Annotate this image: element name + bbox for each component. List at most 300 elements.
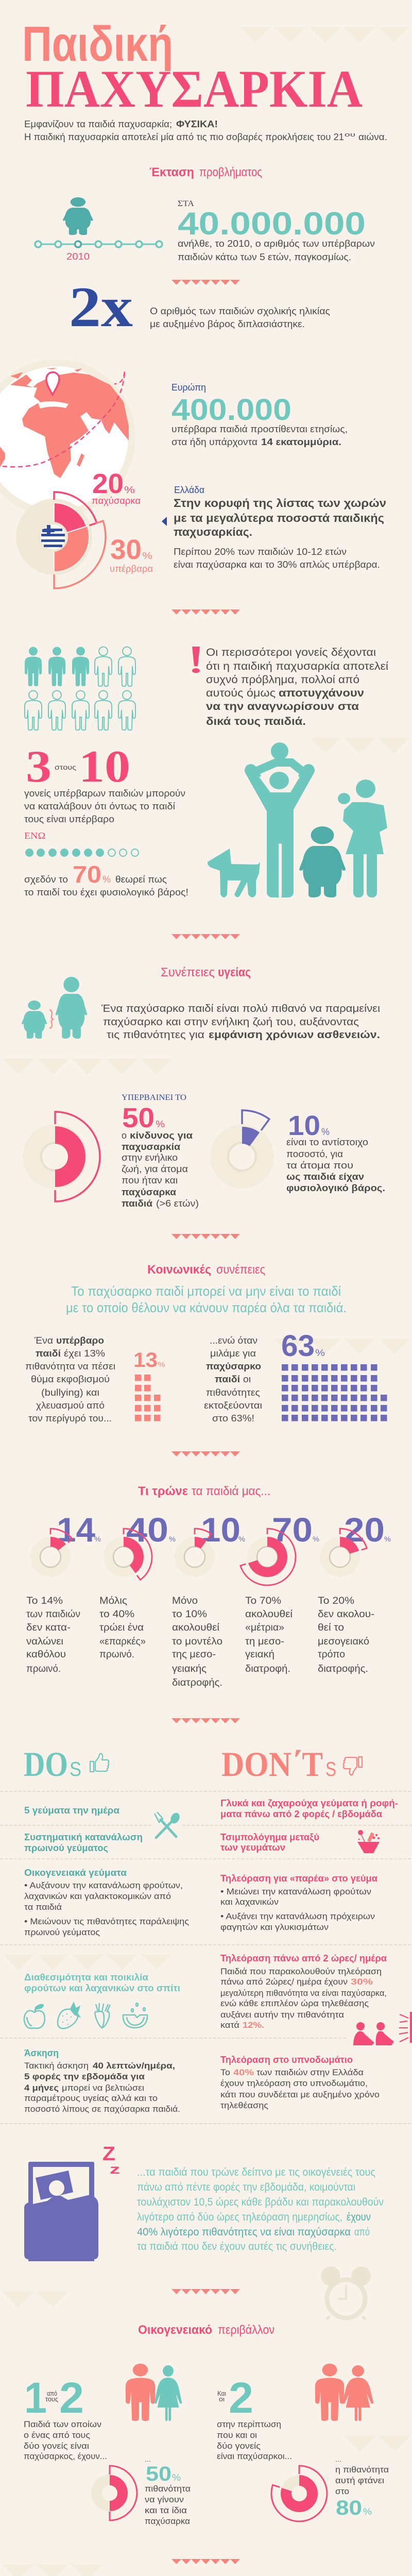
text: 50% chance [145, 2456, 191, 2526]
numbers: diet percentages: % [169, 1535, 176, 1543]
chart: Greece donut [16, 468, 153, 588]
stat: both parents: στην περίπτωση [217, 2419, 281, 2429]
subheading: με το οποίο θέλουν να κάνουν παρέα όλα τα παιδιά. [66, 1300, 347, 1315]
text: family dinner and sleep: τουλάχιστον 10,5 ώρες κάθε βράδυ και παρακολουθούν [137, 2196, 384, 2208]
decorative pennants [309, 738, 410, 754]
text: overweight bullying: (bullying) και [41, 1387, 99, 1398]
text: 50% chance: παχύσαρκα [145, 2516, 190, 2526]
stat: Europe 400.000: υπέρβαρα παιδιά προστίθενται ετησίως, [171, 424, 348, 434]
icon: exclamation mark [192, 647, 200, 673]
icon: thumb up [90, 1754, 109, 1772]
stat: Europe 400.000: στα ήδη υπάρχοντα [171, 437, 258, 447]
text: overweight bullying: Ένα [34, 1335, 53, 1346]
text: 50%: κίνδυνος για [130, 1130, 193, 1141]
text: obese bullying: μιλάμε για [210, 1348, 256, 1359]
text: 80% chance: αυτή φτάνει [335, 2476, 384, 2485]
text: family dinner and sleep: ...τα παιδιά που τρώνε δείπνο με τις οικογένειές τους [137, 2166, 375, 2178]
icon: sleeping child: Z [102, 2143, 115, 2165]
do: breakfast [24, 1832, 143, 1853]
text: column 14%: δεν κατα- [26, 1622, 71, 1633]
pennant row [171, 1451, 240, 1456]
arrow: pointer to Greece [162, 517, 167, 526]
stat: Europe 400.000: 400.000 [171, 393, 291, 427]
heading: extent of the problem [149, 165, 262, 179]
pennant row [171, 1234, 240, 1239]
do: family meals: πρωινού γεύματος [24, 1927, 100, 1937]
stat: 70%: θεωρεί πως [115, 874, 167, 885]
don't: TV with meals: • Μειώνει την κατανάλωση φρούτων [220, 1887, 371, 1896]
text: column 10%: διατροφής. [172, 1677, 222, 1688]
text: column 40%: Μόλις [99, 1596, 127, 1606]
text: column 10%: της μεσο- [172, 1649, 216, 1660]
icon: strawberry [58, 2003, 79, 2028]
text: column 20%: Το 20% [318, 1596, 354, 1606]
icon: children watching TV [353, 2012, 412, 2045]
do: fruit and vegetables: φρούτων και λαχανικών στο σπίτι [24, 1983, 180, 1993]
title: Παιδική [22, 16, 173, 72]
text: column 10%: το μοντέλο [172, 1636, 222, 1647]
title: ΠΑΧΥΣΑΡΚΙΑ [26, 60, 363, 118]
text: health consequences: παχύσαρκο και στην ενήλικη ζωή του, αυξάνοντας [103, 1016, 359, 1028]
pennant row [171, 1718, 240, 1723]
text: 50% [122, 1093, 199, 1209]
stat: 40.000.000 [178, 199, 375, 262]
chart: 13% squares [133, 1349, 165, 1421]
text: Greece: Περίπου 20% των παιδιών 10-12 ετών [174, 547, 347, 557]
text: obese bullying: οι [243, 1374, 251, 1384]
text: parents accept: αποτυγχάνουν [279, 687, 364, 699]
icon: globe [0, 359, 135, 517]
text: family dinner and sleep: πάνω από πέντε φορές την εβδομάδα, κοιμούνται [137, 2181, 355, 2193]
text: column 70%: διατροφή. [245, 1664, 290, 1674]
text: overweight bullying: παιδί [36, 1348, 61, 1359]
text: column 70%: τη μεσο- [245, 1636, 284, 1647]
do: fruit and vegetables [24, 1972, 180, 1993]
text: health consequences: εμφάνιση χρόνιων ασθενειών. [209, 1029, 380, 1041]
text: obese bullying: εκτοξεύονται [204, 1400, 262, 1411]
text: family dinner and sleep: λιγότερο από δύο ώρες τηλεόραση ημερησίως, [137, 2211, 342, 2223]
intro text [24, 119, 387, 142]
don't: TV in bedroom: έχουν τηλεόραση στο υπνοδωμάτιο, [220, 2078, 368, 2088]
text: family dinner and sleep [137, 2166, 384, 2252]
text: column 20%: δεν ακολου- [318, 1609, 374, 1620]
text: 50% chance: και τα ίδια [145, 2505, 187, 2515]
text: Greece: με τα μεγαλύτερα ποσοστά παιδικής [174, 512, 384, 524]
don't: snacking: Τσιμπολόγημα μεταξύ [220, 1832, 319, 1843]
text: 80% chance: 80 [336, 2497, 362, 2519]
text: parents accept: ότι η παιδική παχυσαρκία αποτελεί [206, 660, 388, 672]
heading: extent of the problem: Έκταση [149, 165, 194, 179]
do: exercise: Τακτική άσκηση [24, 2061, 89, 2071]
text: column 40% [99, 1596, 146, 1660]
text: 50% chance: να γίνουν [145, 2495, 184, 2504]
heading: family environment: Οικογενειακό [138, 2323, 212, 2337]
text: column 14% [26, 1596, 80, 1674]
text: 10%: φυσιολογικό βάρος. [286, 1183, 385, 1193]
text: column 14%: των παιδιών [26, 1609, 80, 1620]
do: breakfast: πρωινού γεύματος [24, 1843, 108, 1853]
text: 50%: παχυσαρκία [122, 1142, 180, 1152]
stat: 40.000.000: παιδιών κάτω των 5 ετών, παγκοσμίως. [178, 252, 351, 262]
text: obese bullying: πιθανότητες [206, 1387, 260, 1398]
stat: 40.000.000: ανήλθε, το 2010, ο αριθμός των υπέρβαρων [178, 239, 375, 249]
don't: sweets [220, 1798, 398, 1819]
text: column 10%: το 10% [172, 1609, 207, 1620]
stat: 2x [69, 276, 330, 339]
chart: 63% squares: 63 [281, 1329, 315, 1363]
don't: sweets: Γλυκά και ζαχαρούχα γεύματα ή ροφή- [220, 1798, 398, 1809]
icon: overweight child [63, 197, 93, 235]
text: column 40%: πρωινό. [99, 1649, 134, 1660]
stat: 40.000.000: 40.000.000 [178, 206, 366, 242]
text: 10%: ποσοστό, για [286, 1149, 343, 1159]
don't: TV in bedroom: Το [220, 2067, 230, 2077]
text: 50%: % [156, 1119, 165, 1129]
text: Greece: είναι παχύσαρκα και το 30% απλώς υπέρβαρα. [174, 560, 380, 570]
decorative pennants [2, 2564, 103, 2576]
subheading [66, 1283, 347, 1315]
heading: what children eat [138, 1484, 270, 1498]
icon: sleeping child: z [110, 2161, 120, 2177]
text: 50%: ο [122, 1130, 127, 1141]
icon: child to adult [22, 977, 87, 1039]
heading: health consequences: υγείας [218, 965, 251, 979]
numbers: diet percentages: % [384, 1535, 391, 1543]
stat: both parents: Και [217, 2389, 226, 2397]
dog [208, 849, 260, 897]
text: obese bullying: παχύσαρκο [206, 1361, 261, 1371]
stat: 3 of 10: τους είναι υπέρβαρο [24, 814, 114, 824]
heading: social consequences [147, 1263, 265, 1277]
icon: thumb down [344, 1757, 362, 1775]
text: family dinner and sleep: έχουν [347, 2211, 371, 2223]
stat: 1 of 2 [24, 2374, 107, 2461]
numbers: diet percentages [57, 1511, 391, 1549]
heading: DOs [24, 1744, 109, 1784]
don't: snacking [220, 1832, 319, 1853]
stat: both parents: οι [219, 2395, 225, 2403]
stat: 3 of 10: 3 [26, 742, 52, 792]
dots: 70% [25, 849, 139, 857]
do: family meals: • Αυξάνουν την κατανάλωση φρούτων, [24, 1880, 183, 1890]
text: column 20%: θεί το [318, 1622, 344, 1633]
text: column 20%: μεσογειακό [318, 1636, 369, 1647]
numbers: diet percentages: 20 [344, 1511, 385, 1549]
text: 50%: που ήταν και [122, 1175, 178, 1185]
stat: 70%: το παιδί του έχει φυσιολογικό βάρος! [24, 887, 188, 897]
stat: 70%: % [102, 874, 111, 885]
chart: Greece donut: % [142, 551, 152, 561]
do: exercise: 5 φορές την εβδομάδα για [24, 2072, 145, 2081]
do: exercise: Άσκηση [24, 2048, 59, 2058]
text: parents accept: αυτούς όμως [206, 687, 276, 699]
numbers: diet percentages: 70 [272, 1511, 313, 1549]
icon: apple [24, 2005, 45, 2028]
intro text: αιώνα. [358, 132, 387, 142]
text: column 70% [245, 1596, 293, 1674]
chart: 20% donut [320, 1529, 367, 1577]
stat: both parents [217, 2374, 292, 2461]
don't: TV with meals: • Αυξάνει την κατανάλωση πρόχειρων [220, 1911, 375, 1921]
decorative pennants top [239, 27, 410, 43]
pennant row [171, 934, 240, 939]
text: overweight bullying: πιθανότητα να πέσει [25, 1361, 115, 1371]
do: fruit and vegetables: Διαθεσιμότητα και ποικιλία [24, 1972, 148, 1982]
icon: couple, both obese [315, 2364, 373, 2421]
do: exercise: παραμέτρους υγείας αλλά και το [24, 2093, 158, 2103]
text: overweight bullying: θύμα εκφοβισμού [31, 1374, 110, 1384]
intro text: Η παιδική παχυσαρκία αποτελεί μία από τις πιο σοβαρές προκλήσεις του 21 [24, 132, 344, 142]
stat: 70%: 70 [73, 861, 101, 888]
text: 10%: τα άτομα που [286, 1160, 353, 1171]
father with child [251, 742, 308, 898]
text: column 14%: πρωινό. [26, 1664, 61, 1674]
text: column 40%: «επαρκές» [99, 1636, 146, 1647]
don't: snacking: των γευμάτων [220, 1842, 285, 1853]
chart: Greece donut: 30 [110, 534, 142, 565]
stat: 1 of 2: 1 [24, 2374, 47, 2422]
stat: 1 of 2: τους [45, 2395, 58, 2403]
don't: TV over 2 hours: μεγαλύτερη πιθανότητα να είναι παχύσαρκα, [220, 1988, 387, 1998]
stat: 1 of 2: δύο γονείς είναι [24, 2441, 89, 2451]
chart: Greece donut: % [124, 485, 135, 495]
numbers: diet percentages: % [238, 1535, 245, 1543]
overweight child [299, 826, 346, 897]
text: 50%: (>6 ετών) [156, 1198, 199, 1209]
icon: snack bowl [357, 1830, 380, 1853]
do: exercise: 4 μήνες [24, 2083, 59, 2093]
numbers: diet percentages: 10 [201, 1511, 241, 1549]
do: exercise: ποσοστό λίπους σε παχύσαρκα παιδιά. [24, 2104, 180, 2114]
dashed route [3, 371, 125, 467]
text: 50%: ζωή, για άτομα [122, 1164, 188, 1174]
text: 10%: ως παιδιά είχαν [286, 1172, 364, 1182]
chart: 70% donut [241, 1529, 296, 1585]
text: 10%: 10 [288, 1110, 320, 1141]
text: obese bullying [204, 1335, 262, 1423]
don't: TV in bedroom [220, 2055, 380, 2110]
text: column 70%: γειακή [245, 1649, 274, 1660]
numbers: diet percentages: % [94, 1535, 101, 1543]
icon: family [208, 742, 387, 898]
text: column 70%: Το 70% [245, 1596, 281, 1606]
do: exercise: μπορεί να βελτιώσει [62, 2083, 144, 2093]
heading: social consequences: συνέπειες [216, 1263, 265, 1277]
don't: TV with meals: Τηλεόραση για «παρέα» στο γεύμα [220, 1873, 377, 1884]
intro text: ΦΥΣΙΚΑ! [176, 119, 218, 129]
don't: TV in bedroom: Τηλεόραση στο υπνοδωμάτιο [220, 2055, 353, 2065]
text: Greece [174, 485, 386, 570]
mother with baby [338, 779, 387, 897]
chart: 40% donut [104, 1529, 152, 1580]
don't: TV over 2 hours: αυξάνει αυτήν την πιθανότητα [220, 2010, 344, 2020]
text: 50%: παχύσαρκα [122, 1187, 176, 1197]
text: overweight bullying [25, 1335, 115, 1423]
heading: DOs: DO [24, 1744, 68, 1784]
text: 50% chance: % [172, 2472, 181, 2483]
text: column 40%: το 40% [99, 1609, 134, 1620]
heading: extent of the problem: προβλήματος [199, 165, 262, 179]
text: 80% chance: ... [335, 2456, 341, 2463]
chart: 50% family donut [91, 2466, 137, 2520]
text: overweight bullying: έχει 13% [64, 1348, 105, 1359]
do: breakfast: Συστηματική κατανάλωση [24, 1832, 143, 1842]
chart: 63% squares [281, 1329, 387, 1421]
do: family meals [24, 1868, 189, 1937]
chart: 10% donut [210, 1110, 274, 1189]
do: family meals: λαχανικών και γαλακτοκομικών από [24, 1891, 171, 1901]
text: family dinner and sleep: τα παιδιά που δεν έχουν αυτές τις συνήθειες. [137, 2241, 337, 2252]
don't: TV in bedroom: 40% [233, 2067, 254, 2077]
chart: Greece donut: υπέρβαρα [110, 564, 153, 574]
icon: sleeping child [24, 2143, 120, 2261]
do: exercise [24, 2048, 180, 2114]
heading: family environment: περιβάλλον [218, 2323, 274, 2337]
chart: 10% donut [175, 1529, 215, 1577]
do: exercise: 40 λεπτών/ημέρα, [93, 2061, 175, 2071]
stat: 2x: με αυξημένο βάρος διπλασιάστηκε. [150, 319, 305, 329]
stat: 1 of 2: 2 [59, 2374, 84, 2422]
text: 80% chance: η πιθανότητα [335, 2465, 389, 2475]
icon: couple, one obese [126, 2364, 182, 2421]
heading: health consequences: Συνέπειες [161, 965, 215, 979]
chart: Greece donut: παχύσαρκα [92, 496, 141, 506]
heading: DON'Ts: S [325, 1758, 336, 1781]
chart: 13% squares: % [158, 1360, 165, 1368]
heading: what children eat: Τι τρώνε [138, 1484, 188, 1498]
icon: Greek flag [41, 524, 65, 549]
text: column 14%: ναλώνει [26, 1636, 63, 1647]
chart: 63% squares: % [315, 1348, 325, 1358]
do: family meals: Οικογενειακά γεύματα [24, 1868, 127, 1878]
text: column 10%: ακολουθεί [172, 1622, 220, 1633]
text: obese bullying: στο 63%! [212, 1413, 254, 1423]
numbers: diet percentages: 14 [57, 1511, 95, 1549]
text: 10%: είναι το αντίστοιχο [286, 1137, 368, 1147]
intro text: ου [345, 132, 355, 138]
chart: Greece donut: 20 [92, 468, 124, 499]
stat: 3 of 10: ΕΝΩ [24, 831, 45, 841]
icon grid: parents [25, 647, 135, 730]
text: column 10%: Μόνο [172, 1596, 198, 1606]
heading: social consequences: Κοινωνικές [147, 1263, 211, 1277]
icons: fruit and vegetables [24, 2003, 147, 2028]
text: 80% chance: στο [335, 2486, 349, 2496]
stat: 1 of 2: ο ένας από τους [24, 2430, 90, 2440]
stat: 70%: σχεδόν το [24, 874, 68, 885]
pennant row [171, 2289, 240, 2294]
timeline 2010 [35, 241, 162, 262]
map pin [46, 372, 59, 395]
stat: Europe 400.000: Ευρώπη [171, 382, 206, 393]
intro text: Εμφανίζουν τα παιδιά παχυσαρκία; [24, 119, 172, 129]
chart: 13% squares: 13 [133, 1349, 158, 1371]
text: 50%: στην ενήλικο [122, 1153, 178, 1163]
text: column 10%: γειακής [172, 1664, 207, 1674]
decorative pennants [2, 2292, 68, 2308]
text: parents accept: να την αναγνωρίσουν στα [206, 701, 359, 713]
stat: both parents: 2 [229, 2374, 253, 2422]
stat: 2x: Ο αριθμός των παιδιών σχολικής ηλικίας [150, 306, 330, 316]
chart: 14% donut [30, 1529, 72, 1577]
pennant row [171, 2559, 240, 2564]
text: overweight bullying: υπέρβαρο [56, 1335, 104, 1346]
don't: TV with meals [220, 1873, 377, 1932]
do: family meals: • Μειώνουν τις πιθανότητες παράλειψης [24, 1917, 189, 1926]
stat: both parents: που και οι [217, 2430, 257, 2440]
decorative pennants [3, 1059, 173, 1075]
heading: health consequences [161, 965, 251, 979]
don't: TV over 2 hours: Παιδιά που παρακολουθούν τηλεόραση [220, 1967, 382, 1976]
heading: DOs: S [70, 1758, 81, 1781]
text: 10%: % [321, 1127, 330, 1137]
text: column 20%: τρόπο [318, 1649, 345, 1660]
text: family dinner and sleep: 40% λιγότερο πιθανότητες να είναι παχύσαρκα [137, 2226, 351, 2238]
don't: TV in bedroom: των παιδιών στην Ελλάδα [256, 2067, 364, 2077]
stat: 3 of 10: 10 [79, 742, 130, 792]
text: 50%: ΥΠΕΡΒΑΙΝΕΙ ΤΟ [122, 1093, 186, 1102]
text: 50% chance: ... [145, 2456, 151, 2463]
text: obese bullying: παιδί [215, 1374, 240, 1384]
text: column 14%: καθόλου [26, 1649, 66, 1660]
chart: 80% family donut [271, 2466, 327, 2521]
stat: 1 of 2: από [47, 2389, 57, 2397]
stat: Europe 400.000 [171, 382, 348, 447]
don't: TV in bedroom: τηλεθέασης [220, 2100, 268, 2110]
text: 50% chance: 50 [146, 2463, 171, 2485]
text: 50% chance: πιθανότητα [145, 2484, 191, 2494]
numbers: diet percentages: % [313, 1535, 319, 1543]
text: column 70%: ακολουθεί [245, 1609, 293, 1620]
text: parents accept: δικά τους παιδιά. [206, 716, 306, 727]
text: health consequences: τις πιθανότητες για [107, 1029, 204, 1041]
text: column 20%: διατροφής. [318, 1664, 368, 1674]
don't: TV over 2 hours [220, 1953, 387, 2030]
stat: 3 of 10: στους [55, 763, 76, 771]
heading: what children eat: τα παιδιά μας... [192, 1484, 270, 1498]
don't: sweets: ματα πάνω από 2 φορές / εβδομάδα [220, 1809, 382, 1819]
stat: Europe 400.000: 14 εκατομμύρια. [261, 437, 341, 447]
icon: watermelon [123, 2003, 147, 2028]
timeline 2010: 2010 [66, 251, 90, 262]
decorative pennants [344, 2436, 410, 2452]
stat: 1 of 2: παχύσαρκος, έχουν... [24, 2451, 107, 2461]
text: column 10% [172, 1596, 222, 1688]
don't: TV over 2 hours: ενώ κάθε επιπλέον ώρα τηλεθέασης [220, 1998, 369, 2008]
text: column 70%: «μέτρια» [245, 1622, 284, 1633]
stat: 3 of 10: γονείς υπέρβαρων παιδιών μπορούν [24, 788, 185, 799]
heading: family environment [138, 2323, 274, 2337]
pennant row [171, 280, 240, 285]
text: overweight bullying: τον περίγυρό του... [28, 1413, 112, 1423]
text: family dinner and sleep: από [354, 2226, 370, 2238]
icon: carrots [95, 2003, 110, 2028]
text: overweight bullying: χλευασμού από [36, 1400, 105, 1411]
icon: fork and spoon [154, 1811, 181, 1838]
don't: TV in bedroom: κάτι που συνδέεται με αυξημένο χρόνο [220, 2090, 380, 2099]
text: column 40%: τρώει ένα [99, 1622, 144, 1633]
text: Greece: Ελλάδα [174, 485, 204, 495]
text: 10% [286, 1110, 385, 1193]
do: family meals: τα παιδιά [24, 1902, 62, 1912]
decorative pennants [274, 1338, 410, 1354]
icon: alarm clock [321, 2266, 371, 2319]
do: 5 meals: 5 γεύματα την ημέρα [24, 1805, 119, 1816]
text: parents accept [206, 647, 388, 727]
text: obese bullying: ...ενώ όταν [210, 1335, 258, 1346]
stat: 1 of 2: Παιδιά των οποίων [24, 2419, 101, 2429]
stat: 3 of 10 [24, 742, 185, 841]
